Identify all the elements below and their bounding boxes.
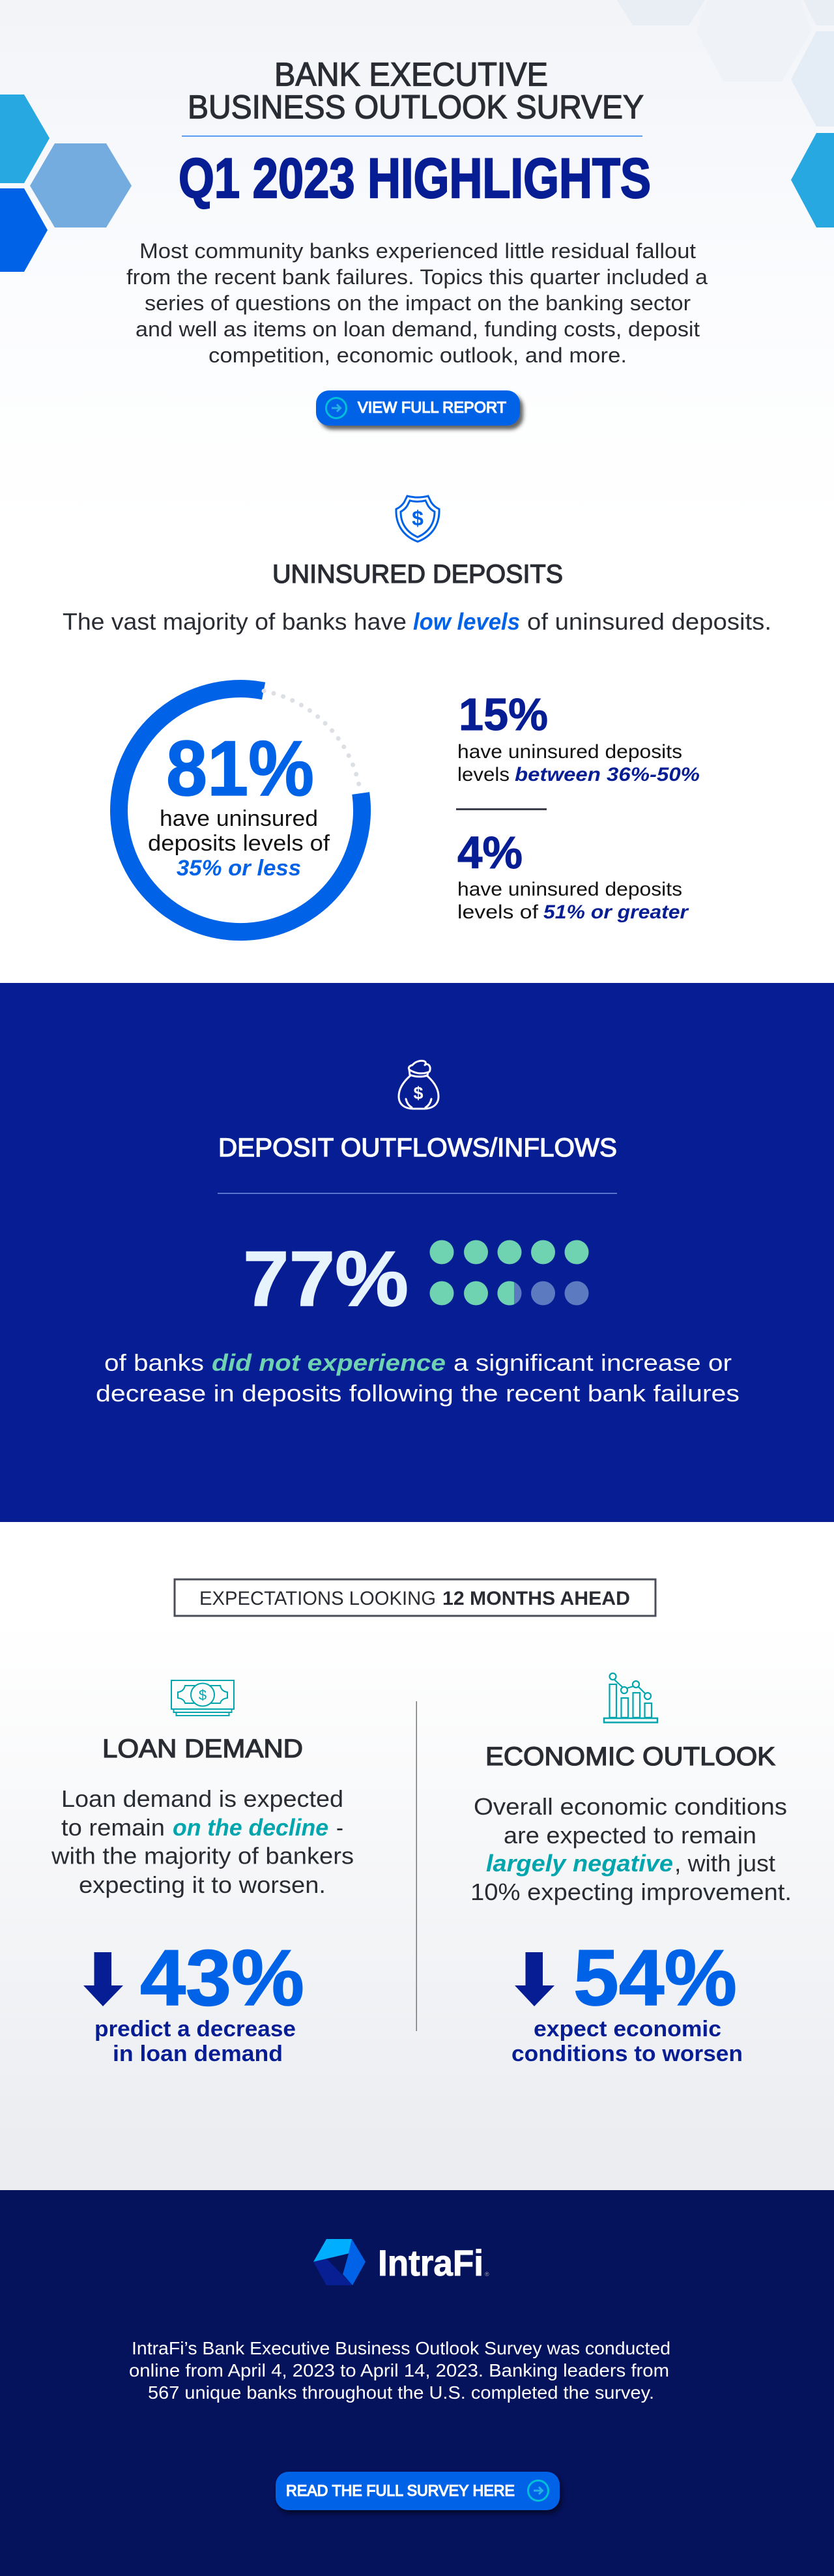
survey note: 567 unique banks throughout the U.S. completed the survey. xyxy=(148,2382,654,2403)
survey note: IntraFi’s Bank Executive Business Outlook Survey was conducted xyxy=(132,2338,670,2358)
stat: 15 percent: levels xyxy=(457,764,510,785)
text: deposit finding: decrease in deposits following the recent bank failures xyxy=(96,1380,740,1407)
body text: are expected to remain xyxy=(504,1822,756,1849)
stat: 77 percent: 77% xyxy=(243,1235,409,1323)
column: loan demand xyxy=(51,1680,354,2066)
body text: - xyxy=(336,1814,343,1841)
logo: IntraFi: ® xyxy=(485,2271,489,2277)
panel: footer xyxy=(0,2190,834,2576)
body text xyxy=(470,1793,792,1905)
button: read the full survey: READ THE FULL SURVEY HERE xyxy=(286,2482,515,2500)
body text xyxy=(51,1785,354,1898)
icon: shield with dollar: $ xyxy=(412,506,424,530)
survey note xyxy=(129,2338,670,2403)
stat caption: in loan demand xyxy=(113,2042,283,2066)
chart: 81 percent ring: 35% or less xyxy=(177,856,301,881)
body text: expecting it to worsen. xyxy=(79,1871,326,1898)
stat: 15 percent: between 36%-50% xyxy=(515,764,700,785)
intro text: Most community banks experienced little residual fallout xyxy=(139,239,696,263)
intro text xyxy=(126,239,708,367)
icon: down arrow xyxy=(83,1952,123,2006)
subheading xyxy=(63,608,771,635)
body text: on the decline xyxy=(173,1814,328,1841)
text: deposit finding: of banks xyxy=(104,1349,204,1376)
title: BUSINESS OUTLOOK SURVEY xyxy=(188,89,644,125)
heading: Q1 2023 highlights: Q1 2023 HIGHLIGHTS xyxy=(179,147,651,210)
title: BANK EXECUTIVE xyxy=(274,56,548,93)
icon: banknote: $ xyxy=(199,1687,207,1703)
body text: to remain xyxy=(61,1814,165,1841)
button: read the full survey xyxy=(276,2472,560,2510)
stat caption: conditions to worsen xyxy=(511,2042,743,2066)
heading: UNINSURED DEPOSITS xyxy=(272,560,563,589)
panel: uninsured deposits xyxy=(63,496,771,932)
stat caption xyxy=(94,2017,296,2066)
icon: shield with dollar xyxy=(396,496,439,542)
logo: IntraFi: IntraFi xyxy=(378,2242,483,2283)
decorative hexagons top right xyxy=(617,0,834,126)
intro text: from the recent bank failures. Topics this quarter included a xyxy=(126,265,708,289)
body text: , with just xyxy=(674,1850,775,1877)
logo: IntraFi xyxy=(313,2239,489,2285)
intro text: and well as items on loan demand, funding costs, deposit xyxy=(136,317,700,341)
decorative hexagons left xyxy=(0,95,132,272)
panel: expectations looking 12 months ahead xyxy=(0,1522,834,2190)
stat: 4 percent: 4% xyxy=(457,827,523,878)
subheading: of uninsured deposits. xyxy=(527,608,771,635)
banner: 12 MONTHS AHEAD xyxy=(442,1588,630,1609)
banner xyxy=(175,1579,655,1616)
stat: 54 percent: 54% xyxy=(573,1933,737,2022)
chart: 81 percent ring: have uninsured xyxy=(160,806,318,831)
icon: down arrow xyxy=(515,1952,554,2006)
panel: header xyxy=(0,0,834,983)
chart: 81 percent ring: deposits levels of xyxy=(148,831,330,856)
panel: deposit outflows and inflows xyxy=(0,983,834,1522)
icon: money bag: $ xyxy=(413,1083,424,1103)
chart: 81 percent ring xyxy=(119,689,362,932)
subheading: low levels xyxy=(413,608,520,635)
title xyxy=(188,56,644,125)
body text: with the majority of bankers xyxy=(51,1842,354,1869)
heading: DEPOSIT OUTFLOWS/INFLOWS xyxy=(218,1134,617,1162)
stat: 4 percent: 51% or greater xyxy=(543,901,689,923)
body text: 10% expecting improvement. xyxy=(470,1879,792,1905)
intro text: series of questions on the impact on the banking sector xyxy=(145,291,691,315)
icon: money bag xyxy=(399,1061,439,1109)
button: view full report xyxy=(316,390,520,426)
body text: largely negative xyxy=(486,1850,673,1877)
survey note: online from April 4, 2023 to April 14, 2023. Banking leaders from xyxy=(129,2360,669,2380)
button: view full report: VIEW FULL REPORT xyxy=(358,399,506,417)
stat: 15 percent xyxy=(457,689,700,785)
stat: 15 percent: 15% xyxy=(459,689,548,740)
stat: 4 percent: have uninsured deposits xyxy=(457,879,682,900)
text: deposit finding: a significant increase or xyxy=(453,1349,732,1376)
stat: 43 percent: 43% xyxy=(140,1933,304,2022)
icon: banknote xyxy=(171,1680,234,1716)
column: economic outlook xyxy=(470,1673,792,2066)
body text: Loan demand is expected xyxy=(61,1785,343,1812)
heading: LOAN DEMAND xyxy=(102,1734,303,1763)
subheading: The vast majority of banks have xyxy=(63,608,407,635)
chart: 81 percent ring: 81% xyxy=(166,725,314,812)
intro text: competition, economic outlook, and more. xyxy=(208,344,627,367)
icon: bar chart with trend xyxy=(604,1673,657,1722)
text: deposit finding xyxy=(96,1349,740,1407)
text: deposit finding: did not experience xyxy=(212,1349,446,1376)
banner: EXPECTATIONS LOOKING xyxy=(199,1588,436,1609)
body text: Overall economic conditions xyxy=(474,1793,787,1820)
stat: 15 percent: have uninsured deposits xyxy=(457,741,682,763)
decorative hexagon right xyxy=(791,133,834,227)
chart: dot scale xyxy=(430,1240,589,1305)
stat: 4 percent: levels of xyxy=(457,901,539,923)
stat caption: expect economic xyxy=(534,2017,721,2042)
stat caption: predict a decrease xyxy=(94,2017,296,2042)
stat: 4 percent xyxy=(457,827,689,923)
heading: ECONOMIC OUTLOOK xyxy=(485,1742,775,1771)
stat caption xyxy=(511,2017,743,2066)
